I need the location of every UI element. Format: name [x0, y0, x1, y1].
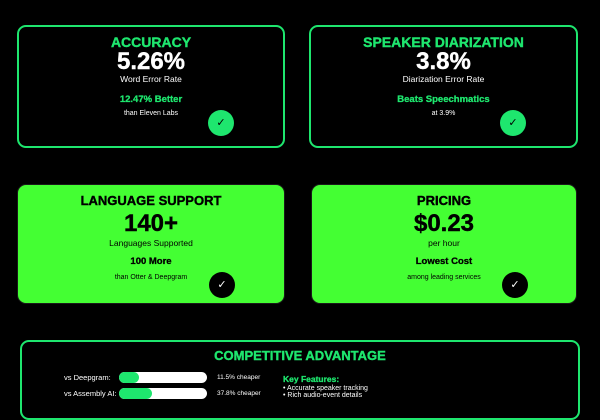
panel: pricing	[311, 184, 577, 304]
key features list: • Accurate speaker tracking	[283, 385, 368, 392]
panel: accuracy	[17, 25, 285, 148]
panel: competitive advantage	[20, 340, 580, 420]
icon: check: ✓	[510, 279, 520, 291]
bar row: assembly ai	[64, 388, 261, 399]
bar row: assembly ai: 37.8% cheaper	[217, 390, 261, 397]
metric: 3.8%: 3.8%	[416, 48, 471, 75]
label: diarization error rate: Diarization Error Rate	[403, 74, 484, 84]
key features list: Key Features:	[283, 374, 339, 384]
icon: check: ✓	[508, 117, 518, 129]
heading: competitive advantage: COMPETITIVE ADVANTAGE	[214, 348, 386, 363]
heading: language support: LANGUAGE SUPPORT	[81, 193, 221, 208]
panel: language support	[17, 184, 285, 304]
highlight: lowest cost: Lowest Cost	[416, 256, 472, 267]
highlight: 12.47% better: 12.47% Better	[120, 94, 182, 105]
highlight: 100 more: 100 More	[130, 256, 172, 267]
key features list: • Rich audio-event details	[283, 392, 362, 399]
metric: 140+: 140+	[124, 210, 178, 237]
bar row: deepgram: vs Deepgram:	[64, 373, 111, 382]
heading: accuracy: ACCURACY	[111, 34, 191, 50]
bar row: deepgram: 11.5% cheaper	[217, 374, 260, 381]
label: per hour: per hour	[428, 238, 460, 248]
metric: $0.23: $0.23	[414, 210, 474, 237]
key features list	[283, 374, 368, 399]
panel: speaker diarization	[309, 25, 578, 148]
heading: speaker diarization: SPEAKER DIARIZATION	[363, 34, 524, 50]
highlight: beats speechmatics: Beats Speechmatics	[397, 94, 490, 105]
note: at 3.9%: at 3.9%	[432, 110, 455, 117]
note: among leading services: among leading services	[407, 274, 481, 281]
note: than otter & deepgram: than Otter & Deepgram	[115, 274, 187, 281]
bar row: assembly ai: vs Assembly AI:	[64, 389, 117, 398]
icon: check	[208, 110, 234, 136]
icon: check	[209, 272, 235, 298]
bar row: deepgram	[64, 372, 260, 383]
icon: check	[502, 272, 528, 298]
note: than eleven labs: than Eleven Labs	[124, 110, 178, 117]
icon: check: ✓	[217, 279, 227, 291]
icon: check	[500, 110, 526, 136]
label: word error rate: Word Error Rate	[120, 74, 182, 84]
label: languages supported: Languages Supported	[109, 238, 193, 248]
heading: pricing: PRICING	[417, 193, 471, 208]
icon: check: ✓	[216, 117, 226, 129]
metric: 5.26%: 5.26%	[117, 48, 185, 75]
